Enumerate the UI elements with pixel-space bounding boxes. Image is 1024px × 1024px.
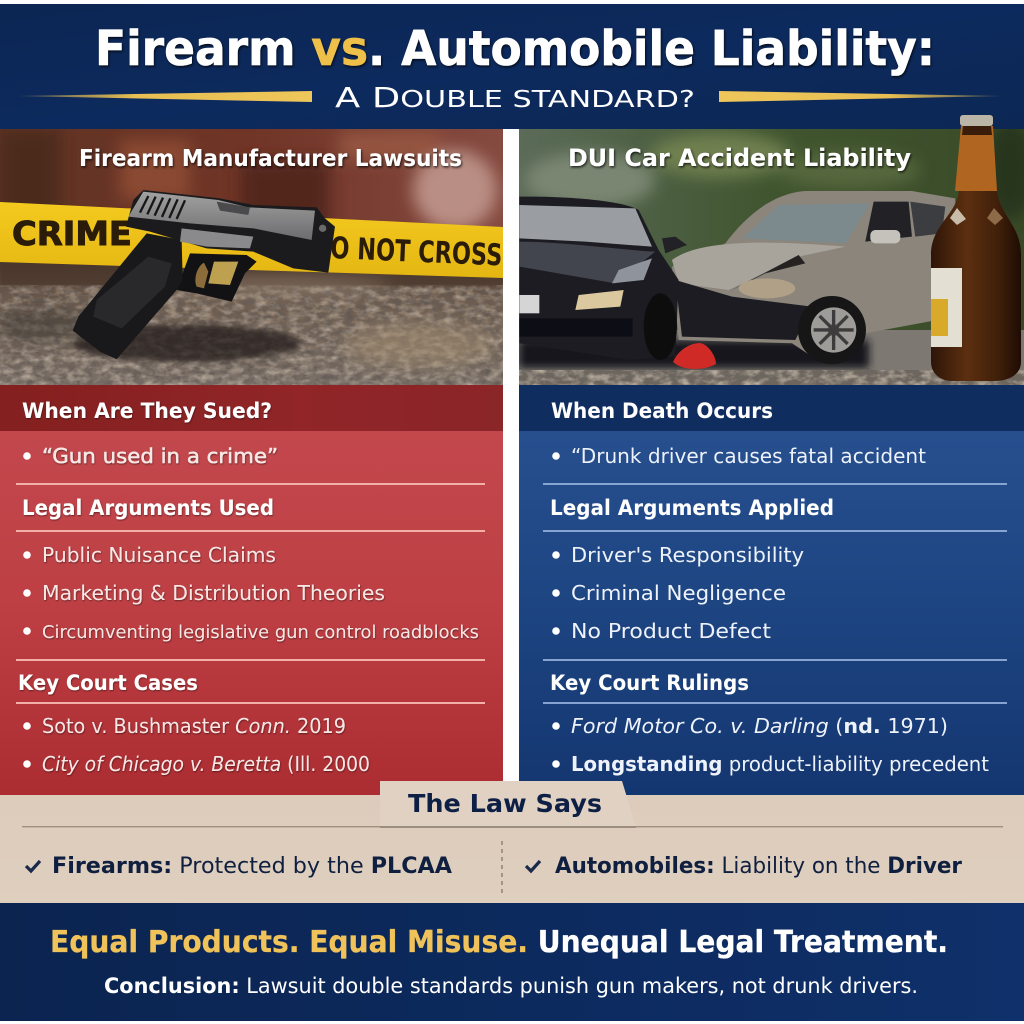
panel: firearm lawsuits details — [0, 385, 503, 795]
panel: DUI photo — [519, 120, 1024, 385]
bullet: soto: Soto v. Bushmaster Conn. 2019 — [42, 714, 346, 738]
section: rulings: Key Court Rulings — [550, 671, 749, 695]
header banner — [0, 4, 1024, 129]
bullet: circumventing: Circumventing legislative gun control roadblocks — [42, 622, 479, 643]
bullet: drunk driver: “Drunk driver causes fatal accident — [571, 444, 926, 468]
gold rule left — [18, 91, 312, 102]
crime tape — [0, 202, 503, 278]
heading: DUI: DUI Car Accident Liability — [568, 144, 911, 172]
section: when sued: When Are They Sued? — [22, 399, 272, 423]
icon: red debris — [673, 343, 716, 369]
tagline: Equal Products. Equal Misuse. Unequal Legal Treatment. — [50, 925, 948, 960]
section: when death: When Death Occurs — [551, 399, 773, 423]
car: black — [519, 197, 687, 360]
crime tape: CRIME — [12, 214, 132, 253]
icon: handgun — [73, 190, 335, 362]
tab: the law says — [380, 781, 636, 828]
footer banner — [0, 903, 1024, 1021]
section: arguments applied: Legal Arguments Applied — [550, 496, 834, 520]
bullet: chicago: City of Chicago v. Beretta (Ill. 2000 — [42, 752, 370, 776]
title: Firearm vs. Automobile Liability: — [95, 21, 935, 77]
panel: DUI details — [519, 385, 1024, 795]
conclusion: Conclusion: Lawsuit double standards punish gun makers, not drunk drivers. — [104, 974, 918, 998]
crime tape: O NOT CROSS — [330, 231, 503, 273]
bullet: ford: Ford Motor Co. v. Darling (nd. 1971) — [571, 714, 948, 738]
subtitle: A D OUBLE STANDARD? — [335, 81, 695, 114]
bullet: responsibility: Driver's Responsibility — [571, 543, 804, 567]
bullet: negligence: Criminal Negligence — [571, 581, 786, 605]
road — [519, 330, 1024, 370]
tab: the law says: The Law Says — [408, 789, 602, 818]
bullet: defect: No Product Defect — [571, 619, 771, 643]
gold rule right — [719, 91, 1002, 102]
bullet: marketing: Marketing & Distribution Theories — [42, 581, 385, 605]
section: cases: Key Court Cases — [18, 671, 198, 695]
item: firearms: Firearms: Protected by the PLCAA — [52, 854, 452, 879]
item: automobiles: Automobiles: Liability on the Driver — [555, 854, 962, 879]
heading: firearm: Firearm Manufacturer Lawsuits — [79, 146, 462, 172]
bullet: gun used: “Gun used in a crime” — [42, 444, 278, 468]
section: arguments: Legal Arguments Used — [22, 496, 274, 520]
panel: firearm photo — [0, 129, 503, 385]
ground — [0, 262, 503, 385]
car: silver — [672, 191, 955, 364]
panel: the law says — [0, 781, 1024, 903]
bullet: nuisance: Public Nuisance Claims — [42, 543, 276, 567]
icon: beer bottle — [931, 115, 1021, 381]
bullet: longstanding: Longstanding product-liability precedent — [571, 752, 989, 776]
